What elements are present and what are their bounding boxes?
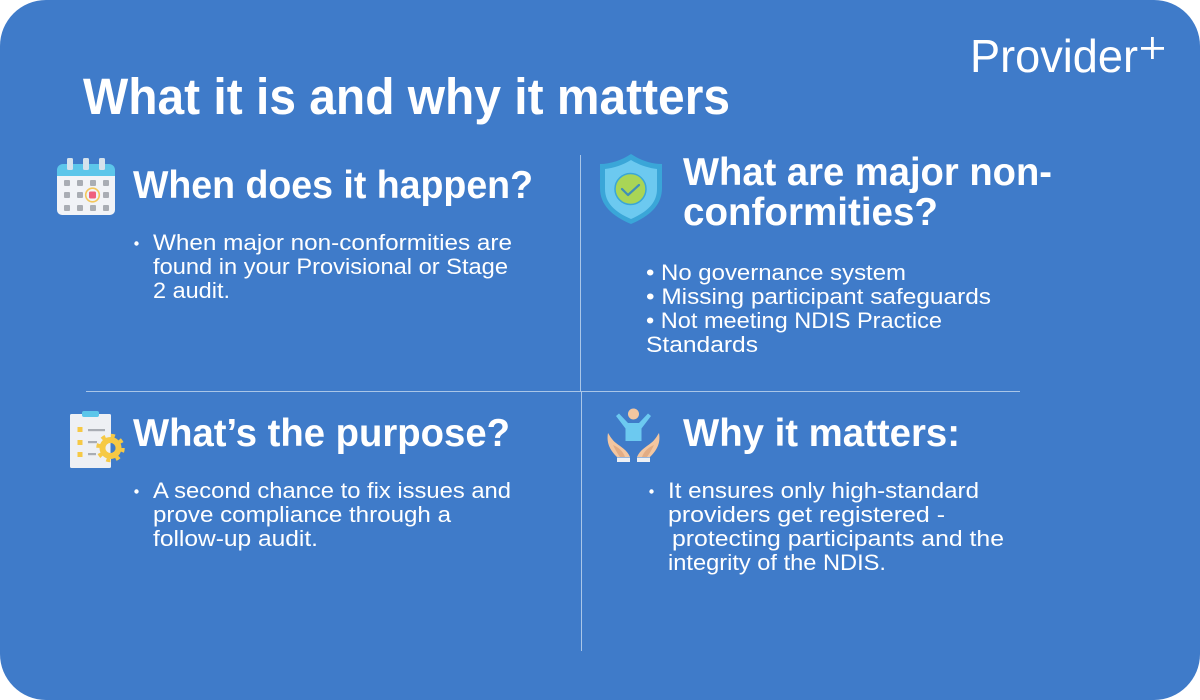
bullet text: When major non-conformities are (153, 230, 512, 255)
icon: calendar (57, 158, 115, 215)
bullet text (646, 260, 991, 357)
panel: why it matters (608, 408, 1004, 575)
bullet text: • Not meeting NDIS Practice (646, 308, 942, 333)
bullet text: Standards (646, 332, 758, 357)
icon: shield (600, 154, 662, 224)
bullet text: providers get registered - (668, 502, 945, 527)
bullet text: 2 audit. (153, 278, 230, 303)
panel: what are major non-conformities (600, 151, 1052, 357)
icon: clipboard with gear (70, 411, 123, 468)
bullet text: integrity of the NDIS. (668, 550, 886, 575)
bullet text: follow-up audit. (153, 526, 318, 551)
heading: What are major non- (683, 151, 1052, 194)
bullet text (649, 478, 1004, 575)
bullet text: protecting participants and the (672, 526, 1004, 551)
bullet text: found in your Provisional or Stage (153, 254, 508, 279)
bullet text (134, 478, 511, 551)
panel: what's the purpose (70, 411, 511, 551)
heading: Why it matters: (683, 412, 960, 455)
title: What it is and why it matters (83, 68, 730, 125)
icon: hands holding person (608, 408, 659, 462)
heading (683, 151, 1052, 234)
bullet text: • Missing participant safeguards (646, 284, 991, 309)
heading: conformities? (683, 191, 938, 234)
bullet text (134, 230, 512, 303)
bullet text: prove compliance through a (153, 502, 452, 527)
heading: What’s the purpose? (133, 412, 510, 455)
bullet text: A second chance to fix issues and (153, 478, 511, 503)
logo: Provider+: Provider (970, 30, 1138, 82)
panel: when does it happen (57, 158, 533, 303)
heading: When does it happen? (133, 164, 533, 207)
bullet text: It ensures only high-standard (668, 478, 979, 503)
bullet text: • No governance system (646, 260, 906, 285)
